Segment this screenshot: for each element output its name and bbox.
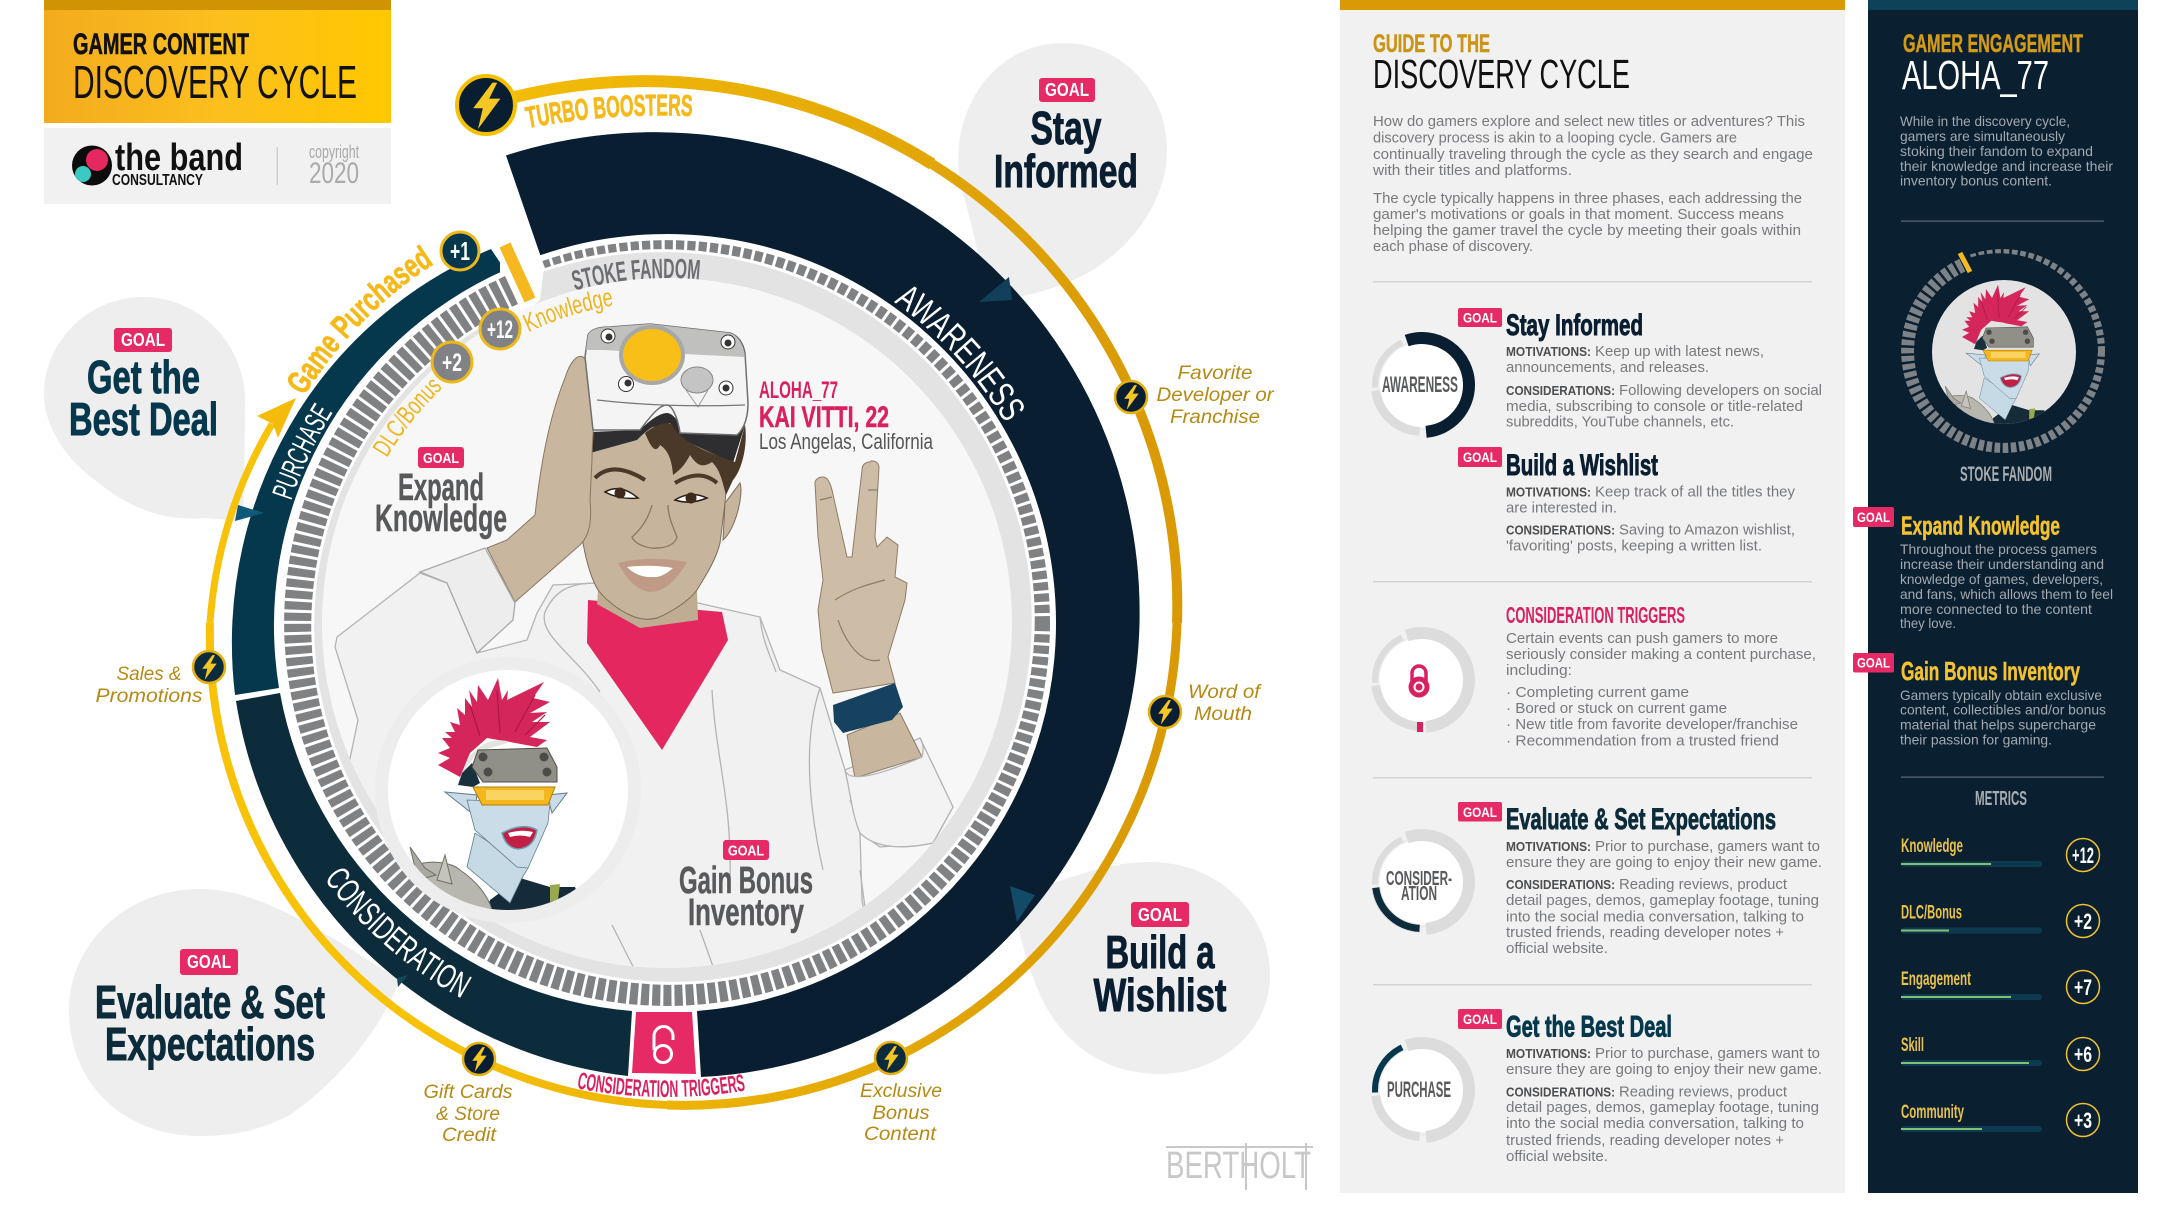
metric: community: +3 — [2074, 1108, 2092, 1133]
icon: turbo booster lightning large — [457, 76, 515, 134]
goal label: gain bonus inventory: Inventory — [688, 892, 804, 934]
badge: +2 DLC — [432, 342, 472, 382]
section: gain bonus inventory: material that helps supercharge — [1900, 716, 2096, 732]
gauge: purchase — [1375, 1043, 1469, 1137]
peace sign hand — [815, 461, 907, 693]
inner gray band — [284, 240, 1050, 1006]
section: build a wishlist: Keep track of all the titles they — [1595, 484, 1796, 500]
section: gain bonus inventory — [1900, 656, 2106, 748]
persona name block: ALOHA_77 — [759, 377, 838, 404]
panel: title header — [44, 0, 391, 123]
curved label: knowledge: Knowledge — [522, 291, 612, 332]
section: get the best deal: ensure they are going to enjoy their new game. — [1506, 1062, 1822, 1078]
section: get the best deal: detail pages, demos, gameplay footage, tuning — [1506, 1100, 1819, 1116]
metric: knowledge: Knowledge — [1901, 836, 1963, 857]
goal label: evaluate and set expectations: GOAL — [187, 952, 231, 972]
icon: booster exclusive bonus — [875, 1042, 907, 1074]
section: get the best deal: Get the Best Deal — [1506, 1010, 1672, 1044]
outer ring: turbo boosters path — [210, 81, 1177, 1105]
curved label: game purchased: Game Purchased — [288, 244, 434, 392]
goal tag: expand knowledge side: GOAL — [1857, 509, 1890, 525]
icon: booster gift cards — [463, 1043, 495, 1075]
section: build a wishlist: MOTIVATIONS: — [1506, 484, 1591, 500]
section: stay informed: subreddits, YouTube channels, etc. — [1506, 414, 1734, 430]
intro paragraph: While in the discovery cycle, — [1900, 113, 2070, 129]
section: consideration triggers: including: — [1506, 663, 1572, 679]
bubble pointer tips on band — [235, 277, 1035, 987]
section: evaluate and set expectations: ensure they are going to enjoy their new game. — [1506, 855, 1822, 871]
goal label: expand knowledge: Expand — [398, 467, 484, 509]
icon: the band logo — [72, 146, 112, 186]
section: consideration triggers: · Bored or stuck on current game — [1506, 701, 1727, 717]
goal tag: best deal — [1458, 1009, 1502, 1029]
booster label: exclusive bonus content — [860, 1081, 942, 1145]
section: stay informed: Following developers on social — [1619, 383, 1822, 399]
booster label: sales and promotions: Promotions — [96, 686, 203, 707]
booster label: sales and promotions: Sales & — [116, 664, 182, 685]
artist signature: BERTHOLT — [1166, 1145, 1311, 1187]
headset lower seam — [597, 400, 745, 406]
gauge: stoke fandom ticks — [1908, 256, 2098, 446]
heading: guide to the: GUIDE TO THE — [1373, 30, 1490, 58]
section: consideration triggers: CONSIDERATION TRIGGERS — [1506, 602, 1685, 628]
metric: skill: +6 — [2074, 1042, 2092, 1067]
goal tag: build a wishlist: GOAL — [1463, 449, 1497, 465]
section: gain bonus inventory: their passion for gaming. — [1900, 732, 2052, 748]
curved label: purchase: PURCHASE — [272, 402, 332, 500]
goal bubble: evaluate and set expectations — [69, 889, 400, 1136]
goal label: gain bonus inventory: GOAL — [728, 842, 764, 860]
goal bubble: stay informed — [958, 43, 1167, 302]
heading: aloha_77: ALOHA_77 — [1902, 52, 2049, 98]
icon: lock — [1408, 666, 1430, 698]
booster label: gift cards and store credit — [424, 1082, 513, 1146]
goal label: get the best deal: Best Deal — [69, 393, 218, 445]
intro paragraph two: gamer's motivations or goals in that moment. Success means — [1373, 207, 1784, 223]
marker: yellow progress bar — [505, 245, 530, 300]
persona name block: Los Angelas, California — [759, 429, 934, 454]
persona name block — [759, 377, 934, 454]
booster label: exclusive bonus content: Content — [864, 1124, 937, 1145]
booster label: favorite developer or franchise: Developer or — [1156, 385, 1274, 406]
goal label: expand knowledge: Knowledge — [375, 498, 507, 540]
eyebrows — [595, 469, 717, 483]
badge: +1 purchased — [441, 232, 479, 270]
gauge: consideration triggers lock — [1375, 633, 1469, 732]
icon: booster word of mouth — [1149, 696, 1181, 728]
logo subline: CONSULTANCY — [112, 172, 203, 189]
goal label: get the best deal: Get the — [87, 351, 200, 403]
goal label: build a wishlist: GOAL — [1138, 905, 1182, 925]
section: stay informed: media, subscribing to console or title-related — [1506, 399, 1803, 415]
section: stay informed: Keep up with latest news, — [1595, 344, 1764, 360]
goal label: evaluate and set expectations: Evaluate & Set — [95, 976, 325, 1028]
section: expand knowledge: and fans, which allows them to feel — [1900, 586, 2113, 602]
booster label: favorite developer or franchise: Favorite — [1178, 363, 1252, 384]
band: consideration phase — [236, 693, 632, 1076]
goal tag: best deal: GOAL — [1463, 1011, 1497, 1027]
booster label: word of mouth: Word of — [1188, 682, 1262, 703]
illustration: gamer portrait — [300, 324, 953, 1000]
panel: gamer engagement — [1868, 0, 2138, 1193]
goal bubble: get the best deal — [44, 297, 245, 521]
intro paragraph one: with their titles and platforms. — [1372, 163, 1572, 179]
booster label: favorite developer or franchise: Franchise — [1170, 407, 1260, 428]
section: stay informed: MOTIVATIONS: — [1506, 344, 1591, 359]
badge: +1 purchased: +1 — [450, 236, 470, 266]
left hand and forearm — [487, 356, 595, 602]
section: evaluate and set expectations: into the social media conversation, talking to — [1506, 910, 1804, 926]
booster label: sales and promotions — [96, 664, 203, 707]
left sleeve cuff — [420, 548, 515, 653]
section: evaluate and set expectations: detail pages, demos, gameplay footage, tuning — [1506, 893, 1819, 909]
band: purchase phase — [232, 249, 505, 695]
intro paragraph: inventory bonus content. — [1900, 172, 2052, 188]
section: stay informed: announcements, and releases. — [1506, 360, 1709, 376]
headset top shell — [586, 324, 745, 357]
hand knuckle details — [820, 490, 885, 661]
section: get the best deal: Prior to purchase, gamers want to — [1595, 1046, 1820, 1062]
face — [583, 426, 730, 619]
intro paragraph two: each phase of discovery. — [1373, 239, 1533, 255]
badge: +12 knowledge — [480, 309, 520, 349]
section: build a wishlist: 'favoriting' posts, keeping a written list. — [1506, 538, 1762, 554]
goal tag: build a wishlist — [1458, 447, 1502, 467]
icon: booster sales — [193, 651, 225, 683]
right forearm — [847, 713, 922, 778]
headset strap shadow base — [585, 324, 748, 435]
goal label: get the best deal: GOAL — [121, 330, 165, 350]
mouth — [618, 559, 687, 592]
goal tag: stay informed: GOAL — [1463, 310, 1497, 326]
intro paragraph: stoking their fandom to expand — [1900, 143, 2093, 159]
gauge: consideration — [1375, 835, 1469, 929]
gauge: consideration: CONSIDER- — [1386, 868, 1452, 890]
hoodie — [334, 572, 954, 907]
section: get the best deal: official website. — [1506, 1149, 1608, 1165]
panel: logo and copyright — [44, 128, 391, 204]
logo wordmark: the band — [115, 137, 243, 179]
heading: discovery cycle: DISCOVERY CYCLE — [1373, 51, 1630, 97]
goal tag: expand knowledge side — [1853, 507, 1894, 527]
section: get the best deal: MOTIVATIONS: — [1506, 1046, 1591, 1061]
metric: community — [1901, 1102, 2100, 1136]
wristwatch — [833, 683, 903, 733]
section: consideration triggers — [1506, 602, 1816, 750]
copyright year: 2020 — [309, 157, 359, 190]
goal label: build a wishlist: Build a — [1106, 926, 1215, 978]
metric: skill — [1901, 1035, 2100, 1070]
hoodie line details — [544, 583, 935, 1000]
gauge: consideration: ATION — [1401, 883, 1437, 905]
section: expand knowledge: knowledge of games, developers, — [1900, 571, 2103, 587]
section: build a wishlist: CONSIDERATIONS: — [1506, 522, 1615, 538]
intro paragraph: gamers are simultaneously — [1900, 128, 2065, 144]
icon: booster favorite developer — [1115, 381, 1147, 413]
goal tag: gain bonus side: GOAL — [1857, 654, 1890, 670]
metric: knowledge: +12 — [2072, 843, 2094, 868]
section: consideration triggers: Certain events can push gamers to more — [1506, 631, 1778, 647]
band: awareness phase — [506, 132, 1140, 1077]
metric: engagement: Engagement — [1901, 969, 1971, 990]
section: consideration triggers: · Recommendation from a trusted friend — [1506, 734, 1779, 750]
gauge: purchase: PURCHASE — [1387, 1077, 1451, 1102]
intro paragraph two: helping the gamer travel the cycle by meeting their goals within — [1373, 223, 1801, 239]
section: stay informed: Stay Informed — [1506, 309, 1643, 342]
arrow: cycle end arrowhead — [257, 398, 296, 438]
section: evaluate and set expectations: trusted friends, reading developer notes + — [1506, 925, 1784, 941]
goal tag: evaluate: GOAL — [1463, 804, 1497, 820]
copyright label: copyright — [309, 142, 359, 162]
curved label: consideration: CONSIDERATION — [328, 868, 472, 998]
goal label: gain bonus inventory: Gain Bonus — [679, 860, 813, 902]
intro paragraph — [1900, 113, 2113, 188]
goal bubble: build a wishlist — [1010, 862, 1270, 1074]
neck — [597, 590, 698, 628]
section: expand knowledge: Expand Knowledge — [1901, 510, 2060, 540]
goal label: stay informed: Stay — [1030, 102, 1102, 154]
curved label: awareness: AWARENESS — [894, 286, 1024, 420]
section: evaluate and set expectations: Evaluate & Set Expectations — [1506, 803, 1776, 836]
curved label: stoke fandom: STOKE FANDOM — [572, 258, 700, 290]
gauge: awareness — [1375, 338, 1469, 432]
eyes — [605, 488, 707, 504]
avatar: aloha_77 portrait — [1932, 280, 2076, 436]
goal label: build a wishlist — [1094, 902, 1226, 1021]
booster label: word of mouth — [1188, 682, 1262, 725]
section: evaluate and set expectations: Reading reviews, product — [1619, 877, 1787, 893]
booster label: word of mouth: Mouth — [1194, 704, 1252, 725]
headset sensors — [601, 329, 735, 407]
booster label: exclusive bonus content: Exclusive — [860, 1081, 942, 1102]
booster label: gift cards and store credit: Gift Cards — [424, 1082, 513, 1103]
intro paragraph one: How do gamers explore and select new titles or adventures? This — [1373, 114, 1805, 130]
panel: guide to the discovery cycle — [1340, 0, 1845, 1193]
marker: consideration triggers lock box — [632, 1012, 696, 1074]
bandana — [587, 600, 728, 750]
section: evaluate and set expectations: Prior to purchase, gamers want to — [1595, 839, 1820, 855]
gauge: awareness: AWARENESS — [1382, 372, 1458, 397]
goal label: stay informed — [994, 78, 1138, 197]
intro paragraph: their knowledge and increase their — [1900, 158, 2113, 174]
headset lens yellow — [619, 325, 685, 385]
intro paragraph one: continually traveling through the cycle as they search and engage — [1373, 147, 1813, 163]
marker: stoke yellow tick — [1960, 253, 1970, 272]
section: build a wishlist: are interested in. — [1506, 500, 1617, 516]
persona name block: KAI VITTI, 22 — [759, 401, 889, 434]
label: stoke fandom: STOKE FANDOM — [1960, 463, 2052, 486]
section: expand knowledge: increase their understanding and — [1900, 556, 2104, 572]
curved label: DLC bonus: DLC/Bonus — [372, 380, 442, 457]
booster label: gift cards and store credit: & Store — [436, 1104, 500, 1125]
heading: metrics: METRICS — [1975, 788, 2027, 810]
ticks: stoke fandom meter — [300, 256, 1034, 990]
curved label: consideration triggers: CONSIDERATION TRIGGERS — [578, 1072, 745, 1098]
section: get the best deal: trusted friends, reading developer notes + — [1506, 1133, 1784, 1149]
goal label: expand knowledge: GOAL — [423, 450, 459, 467]
metric: dlc bonus: DLC/Bonus — [1901, 902, 1962, 924]
section: evaluate and set expectations — [1506, 803, 1822, 957]
goal label: build a wishlist: Wishlist — [1094, 969, 1226, 1021]
section: build a wishlist: Build a Wishlist — [1506, 449, 1658, 482]
booster label: gift cards and store credit: Credit — [442, 1125, 497, 1146]
metric: community: Community — [1901, 1102, 1964, 1123]
ear — [723, 483, 741, 540]
section: consideration triggers: · New title from favorite developer/franchise — [1506, 717, 1798, 733]
section: evaluate and set expectations: official website. — [1506, 941, 1608, 957]
section: gain bonus inventory: content, collectibles and/or bonus — [1900, 702, 2106, 718]
metric: knowledge — [1901, 836, 2100, 872]
inner disc — [322, 278, 1012, 968]
metric: skill: Skill — [1901, 1035, 1924, 1056]
section: expand knowledge: more connected to the content — [1900, 601, 2092, 617]
section: consideration triggers: · Completing current game — [1506, 685, 1689, 701]
intro paragraph one: discovery process is akin to a looping cycle. Gamers are — [1373, 130, 1737, 146]
heading: gamer content: GAMER CONTENT — [73, 28, 249, 61]
goal label: stay informed: Informed — [994, 145, 1138, 197]
metric: engagement: +7 — [2074, 975, 2092, 1000]
goal label: stay informed: GOAL — [1045, 80, 1089, 100]
sleeve cuff — [845, 738, 953, 847]
section: expand knowledge: they love. — [1900, 615, 1956, 631]
metric: dlc bonus: +2 — [2074, 909, 2092, 934]
intro paragraph one — [1372, 114, 1813, 179]
section: stay informed: CONSIDERATIONS: — [1506, 383, 1615, 398]
goal label: evaluate and set expectations: Expectations — [105, 1018, 315, 1070]
section: expand knowledge: Throughout the process gamers — [1900, 541, 2097, 557]
strap — [590, 413, 745, 463]
section: get the best deal — [1506, 1010, 1822, 1165]
curved label: turbo boosters: TURBO BOOSTERS — [524, 94, 692, 128]
metric: engagement — [1901, 969, 2100, 1004]
section: get the best deal: CONSIDERATIONS: — [1506, 1084, 1615, 1100]
avatar medallion — [375, 657, 641, 930]
artist signature — [1166, 1143, 1313, 1190]
booster label: exclusive bonus content: Bonus — [872, 1103, 930, 1124]
hair — [645, 423, 746, 495]
section: expand knowledge — [1900, 510, 2113, 631]
section: build a wishlist — [1506, 449, 1796, 554]
goal label: expand knowledge — [375, 447, 507, 540]
section: evaluate and set expectations: CONSIDERATIONS: — [1506, 877, 1615, 892]
section: stay informed — [1506, 309, 1822, 430]
section: consideration triggers: seriously consider making a content purchase, — [1506, 647, 1816, 663]
booster label: favorite developer or franchise — [1156, 363, 1274, 428]
intro paragraph two: The cycle typically happens in three phases, each addressing the — [1373, 191, 1802, 207]
section: evaluate and set expectations: MOTIVATIONS: — [1506, 839, 1591, 854]
goal label: gain bonus inventory — [679, 840, 813, 934]
goal label: get the best deal — [69, 328, 218, 445]
section: gain bonus inventory: Gamers typically obtain exclusive — [1900, 687, 2102, 703]
nose — [632, 505, 677, 548]
section: get the best deal: into the social media conversation, talking to — [1506, 1116, 1804, 1132]
goal label: evaluate and set expectations — [95, 949, 325, 1070]
goal tag: gain bonus side — [1853, 653, 1894, 672]
heading: discovery cycle: DISCOVERY CYCLE — [73, 56, 357, 108]
section: get the best deal: Reading reviews, product — [1619, 1084, 1787, 1100]
section: build a wishlist: Saving to Amazon wishlist, — [1619, 522, 1795, 538]
intro paragraph two — [1373, 191, 1802, 255]
metric: dlc bonus — [1901, 902, 2100, 938]
badge: +2 DLC: +2 — [442, 349, 462, 377]
badge: +12 knowledge: +12 — [487, 316, 513, 344]
